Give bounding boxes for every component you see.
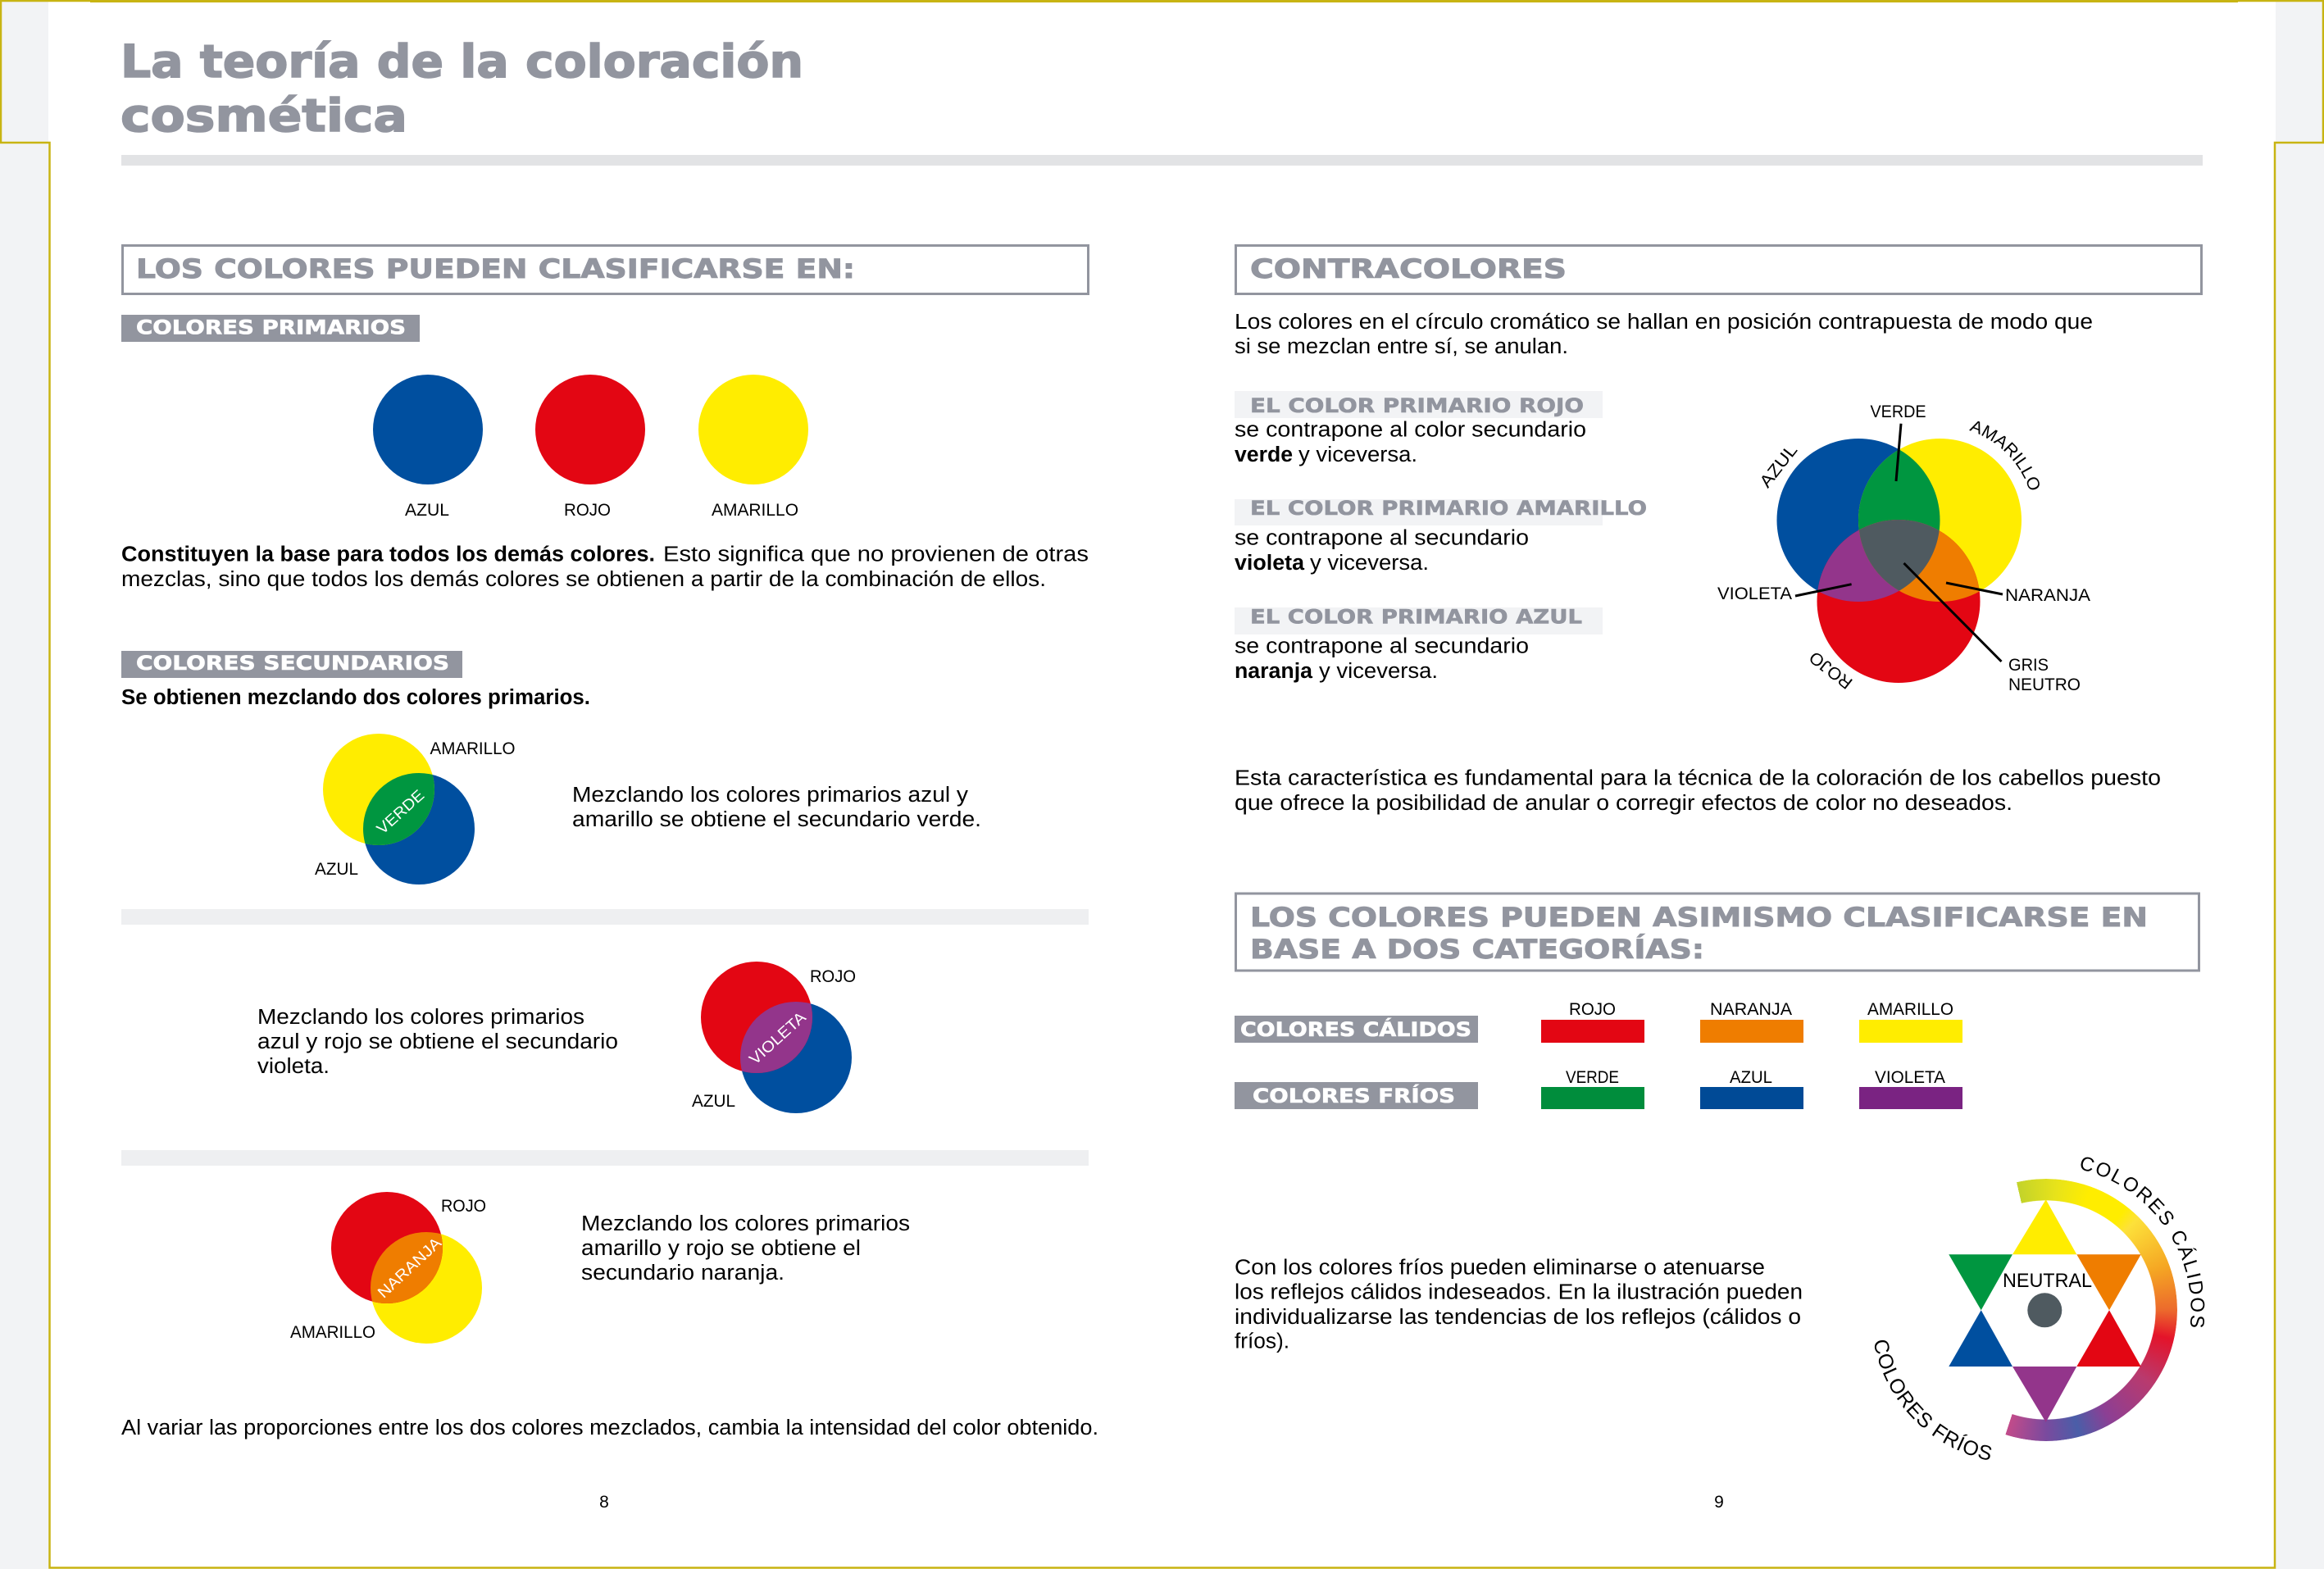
heading: contracolores xyxy=(1236,246,2202,293)
text: green mix: amarillo se obtiene el secundario verde. xyxy=(572,808,981,831)
venn: violet mix: ROJO xyxy=(810,967,856,986)
swatches: warm colours: ROJO xyxy=(1569,1000,1616,1019)
text: orange mix: amarillo y rojo se obtiene el xyxy=(581,1237,861,1260)
text: cool colours note xyxy=(1235,1257,1803,1353)
block: primary blue: EL COLOR PRIMARIO AZUL xyxy=(1250,606,1582,629)
tag: secondary colours: COLORES SECUNDARIOS xyxy=(136,652,449,675)
text: cool colours note: los reflejos cálidos indeseados. En la ilustración pueden xyxy=(1235,1281,1803,1304)
text: orange mix: Mezclando los colores primarios xyxy=(581,1212,910,1235)
text: importance note: Esta característica es fundamental para la técnica de la coloración de los cabellos puesto xyxy=(1235,767,2161,790)
divider 1 xyxy=(121,909,1089,925)
venn: violet mix: VIOLETA xyxy=(746,1009,810,1068)
venn: violet mix: AZUL xyxy=(692,1092,735,1111)
tag: cool colours: COLORES FRÍOS xyxy=(1253,1084,1455,1107)
text: cool colours note: fríos). xyxy=(1235,1330,1289,1353)
block: primary red: se contrapone al color secundario xyxy=(1235,419,1586,442)
tag: secondary colours xyxy=(121,651,462,678)
page number 9: 9 xyxy=(1714,1493,1724,1512)
text: violet mix: Mezclando los colores primarios xyxy=(257,1006,584,1029)
swatches: cool colours: VERDE xyxy=(1566,1068,1619,1087)
heading: two categories: LOS COLORES PUEDEN ASIMISMO CLASIFICARSE EN xyxy=(1250,902,2148,933)
chart: three-circle colour mix: NEUTRO xyxy=(2008,675,2081,694)
venn: green mix: AMARILLO xyxy=(430,739,515,758)
swatches: cool colours xyxy=(1541,1068,1962,1109)
heading: two categories xyxy=(1236,894,2199,971)
text: orange mix: secundario naranja. xyxy=(581,1262,785,1285)
block: primary yellow: EL COLOR PRIMARIO AMARILLO xyxy=(1250,497,1647,520)
ring: warm to cool gradient xyxy=(2005,1179,2177,1441)
text: orange mix xyxy=(581,1212,910,1285)
chart: three-circle colour mix: GRIS xyxy=(2008,656,2049,675)
text: closing note: Al variar las proporciones entre los dos colores mezclados, cambia la intensidad del color obtenido. xyxy=(121,1417,1098,1439)
text: primary colours description: Constituyen la base para todos los demás colores. xyxy=(121,543,655,566)
text: cool colours note: individualizarse las tendencias de los reflejos (cálidos o xyxy=(1235,1306,1801,1329)
text: violet mix xyxy=(257,1006,618,1078)
swatches: warm colours xyxy=(1541,1000,1962,1043)
text: primary colours description: Esto significa que no provienen de otras xyxy=(663,543,1089,566)
label: cool colours arc: COLORES FRÍOS xyxy=(1874,1339,1992,1460)
star triangles xyxy=(1949,1199,2141,1422)
heading: contracolores: CONTRACOLORES xyxy=(1250,253,1567,284)
text: primary colours description xyxy=(121,543,1089,591)
tag: primary colours: COLORES PRIMARIOS xyxy=(136,316,406,339)
chart: three-circle colour mix xyxy=(1717,402,2090,694)
text: contracolores intro: si se mezclan entre sí, se anulan. xyxy=(1235,335,1568,358)
heading: classification xyxy=(123,246,1089,293)
chart: colour star with warm/cool ring xyxy=(1874,1157,2205,1460)
text: cool colours note: Con los colores fríos pueden eliminarse o atenuarse xyxy=(1235,1257,1765,1280)
block: primary blue: naranja xyxy=(1235,660,1313,683)
venn: orange mix: AMARILLO xyxy=(290,1323,375,1342)
chart: three-circle colour mix: AZUL xyxy=(1756,441,1801,491)
block: primary blue: y viceversa. xyxy=(1319,660,1438,683)
title: cosmética xyxy=(121,89,407,142)
icon: red circle: ROJO xyxy=(564,501,611,520)
tag: cool colours xyxy=(1235,1082,1478,1109)
swatches: cool colours: VIOLETA xyxy=(1875,1068,1945,1087)
venn: orange mix: NARANJA xyxy=(375,1235,445,1302)
tag: primary colours xyxy=(121,315,420,342)
text: green mix: Mezclando los colores primarios azul y xyxy=(572,784,968,807)
text: violet mix: violeta. xyxy=(257,1055,330,1078)
block: primary yellow xyxy=(1235,497,1647,575)
text: contracolores intro xyxy=(1235,311,2093,358)
page number 8: 8 xyxy=(599,1493,609,1512)
text: contracolores intro: Los colores en el círculo cromático se hallan en posición contrapuesta de modo que xyxy=(1235,311,2093,334)
heading: two categories: BASE A DOS CATEGORÍAS: xyxy=(1250,934,1704,965)
block: primary blue xyxy=(1235,606,1603,683)
block: primary yellow: se contrapone al secundario xyxy=(1235,527,1529,550)
text: primary colours description: mezclas, sino que todos los demás colores se obtienen a partir de la combinación de ellos. xyxy=(121,568,1046,591)
icon: yellow circle xyxy=(698,375,808,520)
title xyxy=(121,35,803,142)
block: primary red: y viceversa. xyxy=(1298,443,1417,466)
title: La teoría de la coloración xyxy=(121,35,803,88)
venn: orange mix: ROJO xyxy=(441,1197,486,1216)
swatches: warm colours: NARANJA xyxy=(1710,1000,1792,1019)
venn: green mix xyxy=(315,734,515,885)
venn: green mix: VERDE xyxy=(374,787,428,838)
icon: red circle xyxy=(535,375,645,520)
text: importance note xyxy=(1235,767,2161,815)
text: secondary intro: Se obtienen mezclando dos colores primarios. xyxy=(121,686,590,709)
chart: three-circle colour mix: ROJO xyxy=(1806,648,1856,693)
text: green mix xyxy=(572,784,981,831)
heading: classification: LOS COLORES PUEDEN CLASIFICARSE EN: xyxy=(136,253,855,284)
chart: three-circle colour mix: NARANJA xyxy=(2005,586,2090,605)
block: primary yellow: y viceversa. xyxy=(1310,552,1429,575)
tag: warm colours: COLORES CÁLIDOS xyxy=(1240,1017,1471,1041)
text: importance note: que ofrece la posibilidad de anular o corregir efectos de color no deseados. xyxy=(1235,792,2012,815)
neutral centre: NEUTRAL xyxy=(2003,1270,2092,1292)
block: primary red: EL COLOR PRIMARIO ROJO xyxy=(1250,394,1584,417)
divider 2 xyxy=(121,1150,1089,1166)
icon: blue circle: AZUL xyxy=(405,501,449,520)
panel: right page xyxy=(1235,244,2205,1512)
text: violet mix: azul y rojo se obtiene el secundario xyxy=(257,1030,618,1053)
header rule xyxy=(121,155,2203,166)
venn: violet mix xyxy=(692,962,856,1113)
block: primary red: verde xyxy=(1235,443,1293,466)
venn: green mix: AZUL xyxy=(315,860,358,879)
icon: yellow circle: AMARILLO xyxy=(712,501,798,520)
icon: blue circle xyxy=(373,375,483,520)
block: primary yellow: violeta xyxy=(1235,552,1305,575)
swatches: warm colours: AMARILLO xyxy=(1867,1000,1953,1019)
block: primary blue: se contrapone al secundario xyxy=(1235,635,1529,658)
chart: three-circle colour mix: AMARILLO xyxy=(1969,421,2040,490)
primary colour circles xyxy=(373,375,808,520)
panel: left page xyxy=(121,246,1098,1512)
venn: orange mix xyxy=(290,1192,486,1344)
chart: three-circle colour mix: VIOLETA xyxy=(1717,584,1792,603)
chart: three-circle colour mix: VERDE xyxy=(1871,402,1926,421)
label: warm colours arc: COLORES CÁLIDOS xyxy=(2081,1157,2205,1327)
neutral centre xyxy=(2003,1270,2092,1327)
block: primary red xyxy=(1235,391,1603,466)
swatches: cool colours: AZUL xyxy=(1730,1068,1772,1087)
